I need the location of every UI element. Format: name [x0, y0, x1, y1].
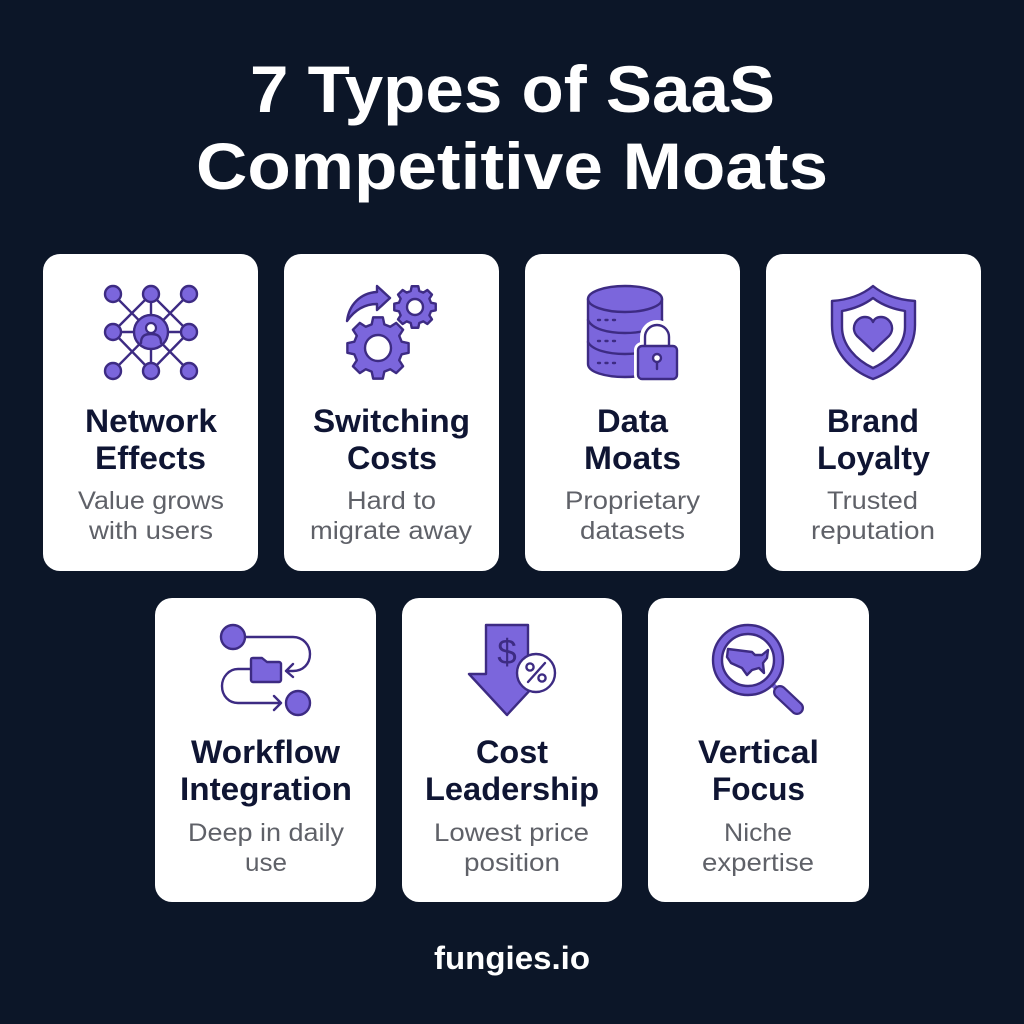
heading: Brand Loyalty — [817, 403, 930, 476]
heading: Workflow Integration: Workflow — [191, 734, 340, 770]
text: Niche expertise — [702, 819, 814, 877]
text: Hard to migrate away — [310, 487, 473, 545]
text: Value grows with users — [78, 487, 224, 545]
heading: Switching Costs — [313, 403, 470, 476]
heading: Data Moats — [584, 403, 681, 476]
text: Lowest price position — [434, 819, 589, 877]
text: Niche expertise: Niche — [724, 819, 792, 847]
panel: Vertical Focus — [648, 598, 869, 902]
text: Proprietary datasets: datasets — [580, 517, 685, 545]
panel: Data Moats — [525, 254, 740, 571]
heading: Switching Costs: Switching — [313, 403, 470, 439]
heading: Brand Loyalty: Brand — [827, 403, 919, 439]
text: Trusted reputation: Trusted — [827, 487, 918, 515]
icon: workflow path with folder — [221, 625, 310, 715]
title: 7 Types of SaaS — [250, 52, 775, 126]
heading: Data Moats: Data — [597, 403, 668, 439]
panel: Network Effects — [43, 254, 258, 571]
heading: Data Moats: Moats — [584, 440, 681, 476]
heading: Network Effects — [85, 403, 217, 476]
icon: magnifier over map — [713, 625, 797, 708]
icon: network of users — [105, 286, 197, 379]
heading: Cost Leadership: Leadership — [425, 771, 599, 807]
heading: Workflow Integration — [180, 734, 352, 807]
panel: Workflow Integration — [155, 598, 376, 902]
footer brand: fungies.io — [434, 940, 590, 976]
text: Trusted reputation — [811, 487, 935, 545]
text: Lowest price position: position — [464, 849, 560, 877]
title — [196, 52, 828, 203]
text: Deep in daily use — [188, 819, 345, 877]
heading: Network Effects: Network — [85, 403, 217, 439]
text: Hard to migrate away: Hard to — [347, 487, 436, 515]
icon: gears with arrow — [347, 286, 436, 379]
panel: Brand Loyalty — [766, 254, 981, 571]
text: Lowest price position: Lowest price — [434, 819, 589, 847]
text: Trusted reputation: reputation — [811, 517, 935, 545]
icon: database with padlock — [588, 286, 677, 379]
heading: Vertical Focus: Focus — [712, 771, 805, 807]
text: Value grows with users: Value grows — [78, 487, 224, 515]
heading: Vertical Focus — [698, 734, 819, 807]
icon: price arrow down with percent badge — [469, 625, 555, 715]
text: Value grows with users: with users — [88, 517, 213, 545]
heading: Cost Leadership — [425, 734, 599, 807]
text: Proprietary datasets — [565, 487, 701, 545]
panel: Cost Leadership — [402, 598, 622, 902]
heading: Network Effects: Effects — [95, 440, 206, 476]
text: Deep in daily use: Deep in daily — [188, 819, 345, 847]
icon: price arrow down with percent badge: $ — [497, 633, 517, 672]
panel: Switching Costs — [284, 254, 499, 571]
heading: Cost Leadership: Cost — [476, 734, 548, 770]
title: Competitive Moats — [196, 129, 828, 203]
text: Niche expertise: expertise — [702, 849, 814, 877]
text: Hard to migrate away: migrate away — [310, 517, 473, 545]
heading: Workflow Integration: Integration — [180, 771, 352, 807]
heading: Brand Loyalty: Loyalty — [817, 440, 930, 476]
text: Proprietary datasets: Proprietary — [565, 487, 701, 515]
text: Deep in daily use: use — [245, 849, 287, 877]
icon: shield with heart — [832, 286, 915, 379]
heading: Vertical Focus: Vertical — [698, 734, 819, 770]
heading: Switching Costs: Costs — [347, 440, 437, 476]
